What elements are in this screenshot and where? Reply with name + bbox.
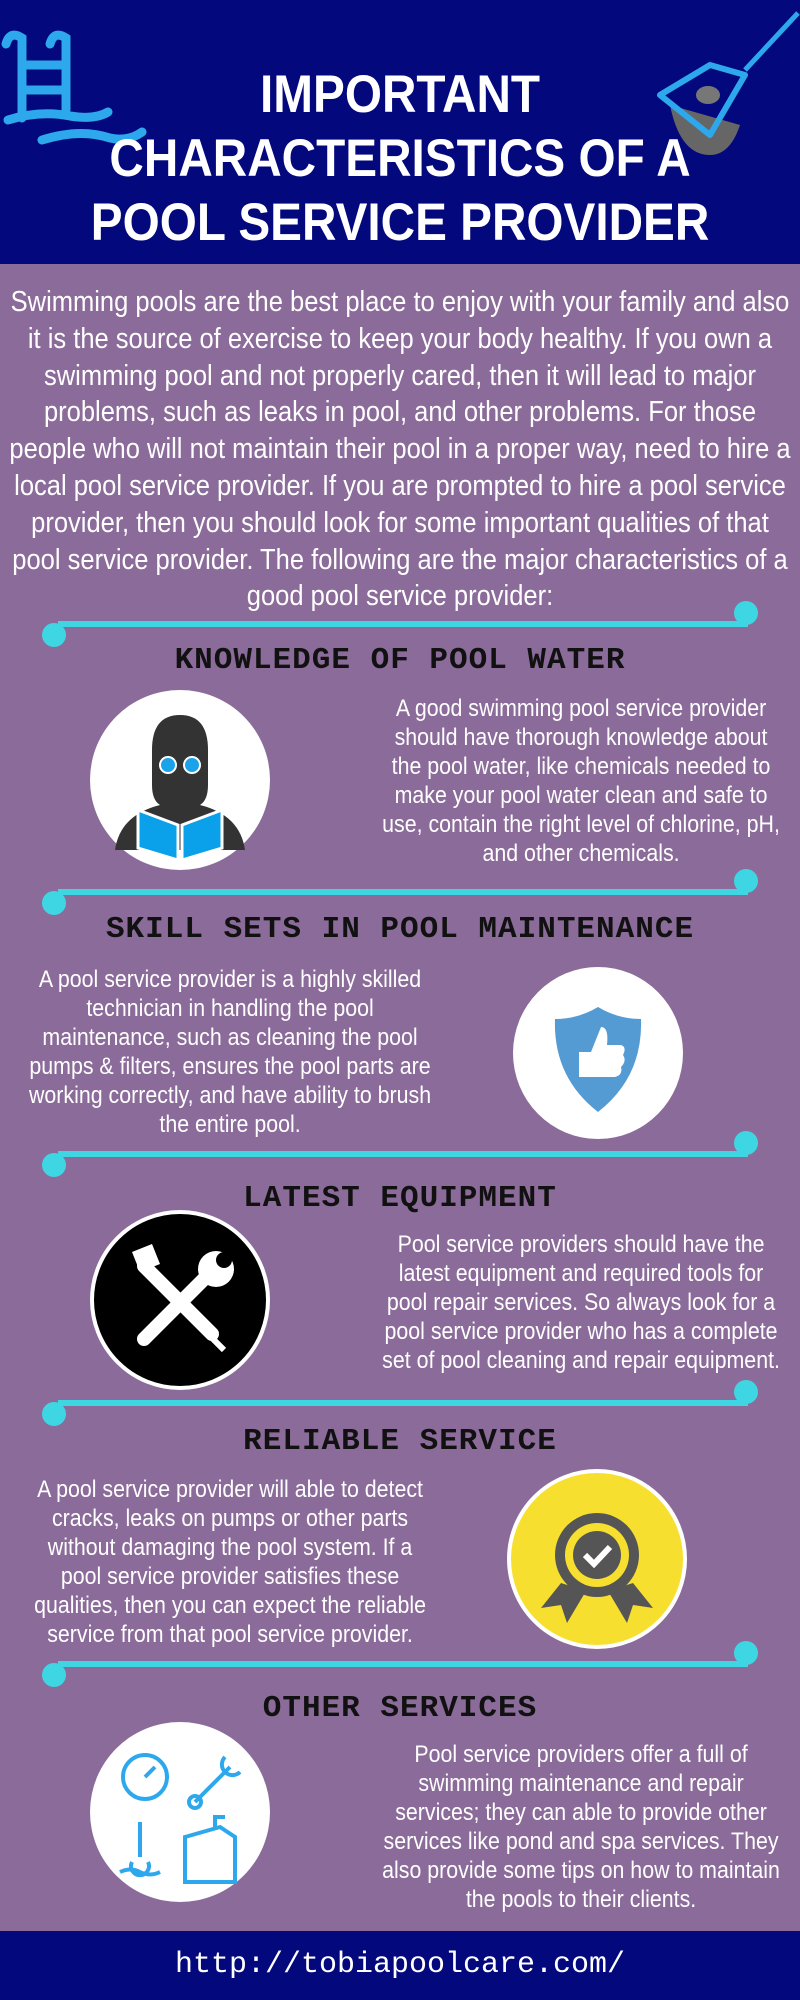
icon 4: award badge [507, 1469, 687, 1649]
intro text: it is the source of exercise to keep your body healthy. If you own a [28, 323, 772, 355]
text 5: services like pond and spa services. They [384, 1828, 779, 1855]
intro text: swimming pool and not properly cared, then it will lead to major [44, 360, 756, 392]
intro text: provider, then you should look for some important qualities of that [31, 507, 769, 539]
text 5: Pool service providers offer a full of [414, 1741, 748, 1768]
intro text [9, 286, 791, 612]
text 3: latest equipment and required tools for [399, 1260, 763, 1287]
heading 4: RELIABLE SERVICE [243, 1424, 557, 1459]
text 4: A pool service provider will able to detect [37, 1476, 423, 1503]
text 1 [382, 695, 780, 867]
heading 2: SKILL SETS IN POOL MAINTENANCE [106, 912, 694, 947]
text 2: technician in handling the pool [86, 995, 374, 1022]
icon 5: services [90, 1722, 270, 1902]
title: POOL SERVICE PROVIDER [91, 193, 709, 252]
text 1: A good swimming pool service provider [396, 695, 766, 722]
header [0, 0, 800, 264]
intro text: Swimming pools are the best place to enjoy with your family and also [11, 286, 789, 318]
text 3: set of pool cleaning and repair equipment. [382, 1347, 780, 1374]
text 3 [382, 1231, 780, 1374]
icon: skimmer net [657, 11, 800, 155]
text 3: pool repair services. So always look for a [387, 1289, 775, 1316]
text 4 [34, 1476, 426, 1648]
intro text: problems, such as leaks in pool, and other problems. For those [44, 396, 756, 428]
text 1: use, contain the right level of chlorine, pH, [382, 811, 780, 838]
text 2: pumps & filters, ensures the pool parts are [29, 1053, 431, 1080]
text 4: pool service provider satisfies these [61, 1563, 399, 1590]
intro text: good pool service provider: [247, 580, 553, 612]
intro text: people who will not maintain their pool in a proper way, need to hire a [9, 433, 791, 465]
text 1: should have thorough knowledge about [395, 724, 767, 751]
heading 3: LATEST EQUIPMENT [243, 1181, 557, 1216]
text 4: qualities, then you can expect the reliable [34, 1592, 426, 1619]
title: CHARACTERISTICS OF A [109, 129, 691, 188]
text 5 [382, 1741, 780, 1913]
footer url: http://tobiapoolcare.com/ [175, 1948, 625, 1982]
divider 4 [42, 1380, 758, 1426]
intro text: local pool service provider. If you are prompted to hire a pool service [14, 470, 786, 502]
divider 3 [42, 1131, 758, 1177]
divider 2 [42, 869, 758, 915]
intro text: pool service provider. The following are the major characteristics of a [12, 544, 788, 576]
divider 1 [42, 601, 758, 647]
title [91, 65, 709, 252]
text 1: the pool water, like chemicals needed to [392, 753, 770, 780]
text 5: swimming maintenance and repair [418, 1770, 744, 1797]
text 2: A pool service provider is a highly skilled [39, 966, 421, 993]
text 1: make your pool water clean and safe to [395, 782, 767, 809]
icon 2: shield thumbs up [513, 967, 683, 1139]
text 5: services; they can able to provide other [395, 1799, 767, 1826]
footer url [0, 1931, 800, 2000]
text 2 [29, 966, 431, 1138]
text 2: the entire pool. [159, 1111, 301, 1138]
title: IMPORTANT [260, 65, 540, 124]
text 4: service from that pool service provider. [47, 1621, 413, 1648]
text 5: also provide some tips on how to maintain [382, 1857, 780, 1884]
text 4: without damaging the pool system. If a [48, 1534, 412, 1561]
heading 1: KNOWLEDGE OF POOL WATER [175, 643, 625, 678]
text 3: Pool service providers should have the [398, 1231, 764, 1258]
icon 1: reader [90, 690, 270, 870]
heading 5: OTHER SERVICES [263, 1691, 537, 1726]
icon 3: tools [90, 1210, 270, 1390]
text 2: working correctly, and have ability to brush [29, 1082, 431, 1109]
text 3: pool service provider who has a complete [385, 1318, 778, 1345]
text 2: maintenance, such as cleaning the pool [42, 1024, 418, 1051]
divider 5 [42, 1641, 758, 1687]
text 5: the pools to their clients. [466, 1886, 696, 1913]
text 1: and other chemicals. [482, 840, 680, 867]
text 4: cracks, leaks on pumps or other parts [52, 1505, 408, 1532]
icon: pool ladder [2, 30, 146, 144]
